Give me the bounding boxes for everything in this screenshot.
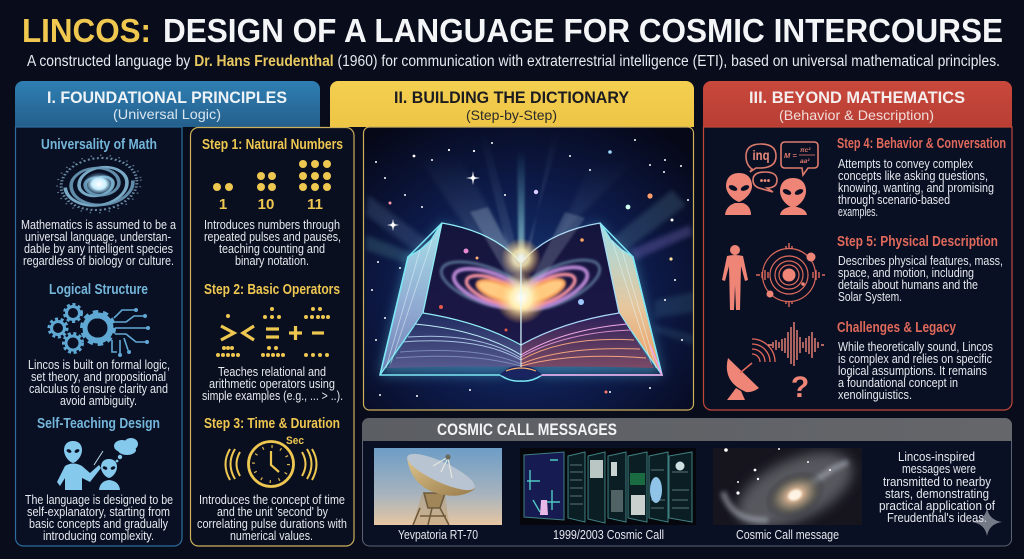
- icon: sparkle: [972, 508, 1002, 536]
- text: self-teaching design: self-explanatory, starting from: [27, 505, 170, 519]
- text: step 3: Introduces the concept of time: [199, 493, 345, 507]
- text: universality of math: regardless of biology or culture.: [23, 254, 174, 268]
- cosmic panel frame: [362, 418, 1012, 546]
- caption: 1999/2003 cosmic call: 1999/2003 Cosmic Call: [553, 528, 664, 542]
- text: step 4: [838, 157, 994, 219]
- heading: step 1: Step 1: Natural Numbers: [202, 137, 343, 153]
- text: step 1: [204, 218, 341, 268]
- sub-panel: foundational column: [16, 127, 182, 546]
- text: self-teaching design: The language is designed to be: [25, 493, 173, 507]
- heading: section II: (Step-by-Step): [466, 107, 557, 123]
- text: challenges and legacy: [838, 340, 993, 402]
- text: logical structure: set theory, and propositional: [31, 370, 166, 384]
- heading: cosmic call messages: [362, 418, 1012, 441]
- heading: section I: [15, 81, 320, 127]
- caption: cosmic call message: Cosmic Call message: [736, 528, 839, 542]
- stars: [371, 139, 689, 397]
- icon: spiral galaxy: [54, 151, 144, 217]
- text: self-teaching design: [25, 493, 173, 543]
- text: lincos-inspired messages: Freudenthal's ideas.: [887, 511, 987, 525]
- text: challenges and legacy: xenolinguistics.: [838, 388, 912, 402]
- text: universality of math: universal language, understan-: [25, 230, 171, 244]
- text: challenges and legacy: is complex and relies on specific: [838, 352, 992, 366]
- book pages with galaxy: [423, 223, 521, 345]
- panel: foundational principles: [15, 81, 320, 546]
- panel: beyond mathematics: [703, 81, 1012, 410]
- text: step 1: teaching counting and: [219, 242, 325, 256]
- heading: section II: II. BUILDING THE DICTIONARY: [394, 88, 630, 107]
- book fanned pages: [388, 313, 521, 368]
- text: challenges and legacy: logical assumptions. It remains: [838, 364, 987, 378]
- text: step 4: knowing, wanting, and promising: [838, 181, 994, 195]
- text: step 3: and the unit 'second' by: [217, 505, 329, 519]
- heading: cosmic call messages: COSMIC CALL MESSAGES: [437, 420, 617, 439]
- photo: cosmic call message sheets: [520, 448, 696, 525]
- heading: challenges and legacy: Challenges & Legacy: [837, 320, 956, 336]
- heading: section I: (Universal Logic): [113, 106, 221, 122]
- text: step 2: simple examples (e.g., ... > ..).: [202, 389, 343, 403]
- heading: section I: I. FOUNDATIONAL PRINCIPLES: [47, 88, 287, 107]
- icon: pulse dots: [213, 160, 331, 191]
- binary labels: 10: [258, 196, 274, 213]
- panel: building the dictionary: [330, 81, 694, 410]
- photo: spiral galaxy: [713, 448, 862, 525]
- heading: section II: [330, 81, 694, 127]
- heading: section III: (Behavior & Description): [779, 107, 934, 123]
- text: lincos-inspired messages: stars, demonstrating: [885, 487, 989, 501]
- icon: aliens in conversation: •••: [760, 176, 771, 187]
- text: self-teaching design: basic concepts and gradually: [29, 517, 169, 531]
- text: lincos-inspired messages: Lincos-inspired: [898, 450, 975, 464]
- icon: operators with dots: [216, 307, 330, 357]
- heading: section III: [703, 81, 1012, 127]
- icon: aliens in conversation: inq: [752, 147, 770, 163]
- panel: steps 1 to 3: [190, 128, 354, 546]
- icon: aliens in conversation: aa²: [800, 158, 810, 165]
- space background: [363, 127, 694, 410]
- text: universality of math: dable by any intelligent species: [24, 242, 173, 256]
- text: logical structure: avoid ambiguity.: [60, 394, 137, 408]
- heading: step 3: Step 3: Time & Duration: [204, 416, 340, 432]
- light rays: [364, 158, 693, 344]
- text: lincos-inspired messages: [879, 450, 995, 525]
- text: challenges and legacy: a foundational concept in: [838, 376, 958, 390]
- icon: alien teacher and student: [57, 438, 138, 490]
- text: logical structure: calculus to ensure clarity and: [29, 382, 168, 396]
- text: lincos-inspired messages: practical application of: [879, 499, 995, 513]
- text: step 2: arithmetic operators using: [209, 377, 335, 391]
- heading: section III: III. BEYOND MATHEMATICS: [749, 88, 965, 107]
- icon: aliens in conversation: πc²: [800, 147, 811, 154]
- text: step 4: through scenario-based: [838, 193, 950, 207]
- text: step 5: details about humans and the: [838, 278, 978, 292]
- text: step 3: [197, 493, 347, 543]
- book outline glow: [380, 223, 662, 381]
- text: universality of math: Mathematics is assumed to be a: [21, 218, 176, 232]
- text: logical structure: [28, 358, 170, 408]
- text: logical structure: Lincos is built on formal logic,: [28, 358, 170, 372]
- text: step 5: Solar System.: [838, 290, 902, 304]
- illustration: glowing open book in space: [363, 127, 694, 410]
- text: step 5: space, and motion, including: [838, 266, 974, 280]
- book glow and wedges: [380, 223, 662, 375]
- icon: radio dish, signal and question mark: ?: [791, 371, 809, 404]
- dictionary frame: [364, 127, 694, 410]
- text: step 1: repeated pulses and pauses,: [204, 230, 341, 244]
- text: step 4: Attempts to convey complex: [838, 157, 974, 171]
- heading: logical structure: Logical Structure: [49, 282, 148, 298]
- binary labels: [219, 196, 323, 213]
- text: step 1: binary notation.: [235, 254, 309, 268]
- heading: universality of math: Universality of Math: [41, 137, 157, 153]
- text: step 2: Teaches relational and: [218, 365, 326, 379]
- title: LINCOS:: [22, 13, 151, 50]
- text: universality of math: [21, 218, 176, 268]
- icon: aliens in conversation: [725, 142, 818, 215]
- caption: Yevpatoria: Yevpatoria RT-70: [398, 528, 478, 542]
- text: step 4: concepts like asking questions,: [838, 169, 988, 183]
- rays over pages: [470, 207, 530, 298]
- text: lincos-inspired messages: transmitted to nearby: [883, 475, 992, 489]
- icon: aliens in conversation: M =: [784, 151, 797, 160]
- photo: radio telescope: [374, 447, 502, 525]
- text: step 3: correlating pulse durations with: [197, 517, 347, 531]
- binary labels: 1: [219, 196, 227, 213]
- heading: self-teaching design: Self-Teaching Design: [37, 416, 160, 432]
- text: step 5: [838, 254, 1003, 304]
- sub-panel: steps column: [190, 128, 354, 546]
- icon: radio dish, signal and question mark: [727, 322, 824, 404]
- sub-panel: beyond mathematics body: [704, 127, 1012, 410]
- icon: human and solar system: [722, 243, 825, 310]
- panel: cosmic call messages: [362, 418, 1012, 546]
- heading: step 2: Step 2: Basic Operators: [204, 282, 340, 298]
- text: step 2: [202, 365, 343, 403]
- icon: gears and circuit: [49, 304, 150, 357]
- text: lincos-inspired messages: messages were: [902, 462, 976, 476]
- text: step 3: numerical values.: [230, 529, 313, 543]
- text: step 4: examples.: [838, 205, 878, 219]
- text: challenges and legacy: While theoretically sound, Lincos: [838, 340, 993, 354]
- binary labels: 11: [307, 196, 323, 213]
- icon: clock with pulses: Sec: [286, 435, 304, 447]
- icon: clock with pulses: [226, 435, 316, 486]
- text: self-teaching design: introducing complexity.: [43, 529, 154, 543]
- text: step 1: Introduces numbers through: [204, 218, 340, 232]
